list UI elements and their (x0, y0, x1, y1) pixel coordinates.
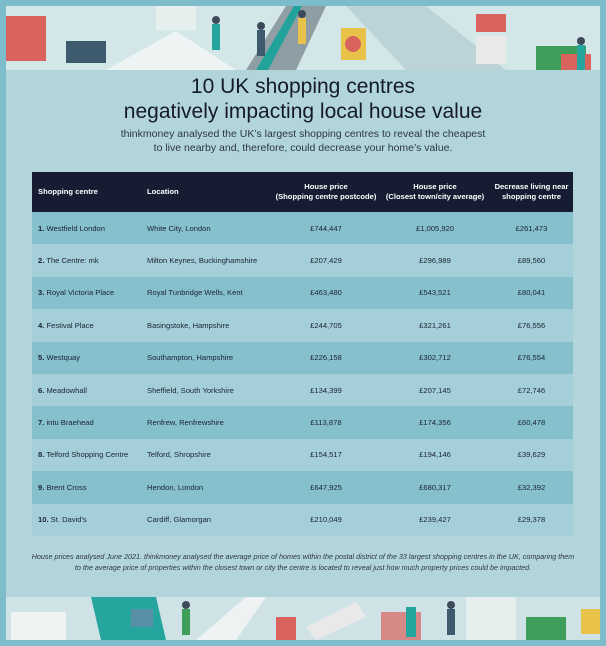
data table: 2. The Centre: mk (38, 256, 99, 265)
data table: £76,556 (518, 321, 545, 330)
data table: £154,517 (310, 450, 342, 459)
data table: (Closest town/city average) (386, 192, 484, 201)
data table: £647,925 (310, 483, 342, 492)
data table: £302,712 (419, 353, 451, 362)
illustration: bottom shopping mall banner (6, 597, 600, 640)
data table: House price (413, 182, 457, 191)
data table: 6. Meadowhall (38, 386, 87, 395)
data table: 5. Westquay (38, 353, 80, 362)
data table: Milton Keynes, Buckinghamshire (147, 256, 257, 265)
data table: Telford, Shropshire (147, 450, 211, 459)
data table: 7. intu Braehead (38, 418, 94, 427)
title: 10 UK shopping centres (191, 75, 415, 98)
data table: 10. St. David's (38, 515, 87, 524)
data table: (Shopping centre postcode) (276, 192, 376, 201)
data table: £210,049 (310, 515, 342, 524)
data table: £680,317 (419, 483, 451, 492)
title: negatively impacting local house value (124, 100, 482, 123)
footnote: House prices analysed June 2021. thinkmoney analysed the average price of homes within the postal district of the 33 largest shopping centres in the UK, comparing them to the average price of properties within the closest town or city the centre is located to reveal just how much property prices could be impacted. (32, 552, 574, 572)
data table: Shopping centre (38, 187, 98, 196)
data table: 3. Royal Victoria Place (38, 288, 114, 297)
subtitle: thinkmoney analysed the UK’s largest shopping centres to reveal the cheapest (121, 128, 485, 140)
data table: £39,629 (518, 450, 545, 459)
data table: £261,473 (516, 224, 547, 233)
data table: £60,478 (518, 418, 545, 427)
illustration: top shopping mall banner (6, 6, 600, 70)
data table: £239,427 (419, 515, 451, 524)
title (124, 75, 482, 123)
data table: Cardiff, Glamorgan (147, 515, 211, 524)
data table: 4. Festival Place (38, 321, 94, 330)
data table: Decrease living near (495, 182, 568, 191)
data table: £32,392 (518, 483, 545, 492)
data table: £744,447 (310, 224, 342, 233)
data table: £76,554 (518, 353, 545, 362)
data table: £463,480 (310, 288, 342, 297)
data table: £321,261 (419, 321, 451, 330)
data table: White City, London (147, 224, 211, 233)
data table: House price (304, 182, 348, 191)
data table: £194,146 (419, 450, 451, 459)
data table: 8. Telford Shopping Centre (38, 450, 128, 459)
subtitle: to live nearby and, therefore, could decrease your home’s value. (154, 142, 452, 154)
data table: £134,399 (310, 386, 342, 395)
data table: £174,356 (419, 418, 451, 427)
data table: £244,705 (310, 321, 342, 330)
data table: £543,521 (419, 288, 451, 297)
data table: £296,989 (419, 256, 451, 265)
subtitle (120, 128, 486, 154)
data table: £207,429 (310, 256, 342, 265)
data table: 1. Westfield London (38, 224, 105, 233)
data table: 9. Brent Cross (38, 483, 87, 492)
data table: Hendon, London (147, 483, 203, 492)
data table: £207,145 (419, 386, 451, 395)
data table: shopping centre (502, 192, 561, 201)
data table: Basingstoke, Hampshire (147, 321, 229, 330)
data table: £1,005,920 (416, 224, 454, 233)
data table: £80,041 (518, 288, 545, 297)
data table: £89,560 (518, 256, 545, 265)
data table: Royal Tunbridge Wells, Kent (147, 288, 243, 297)
data table: Sheffield, South Yorkshire (147, 386, 234, 395)
data table: Location (147, 187, 179, 196)
data table: £113,878 (310, 418, 342, 427)
data table: Renfrew, Renfrewshire (147, 418, 224, 427)
data table: Southampton, Hampshire (147, 353, 233, 362)
data table: £72,746 (518, 386, 545, 395)
data table (32, 172, 573, 536)
data table: £29,378 (518, 515, 545, 524)
data table: £226,158 (310, 353, 342, 362)
